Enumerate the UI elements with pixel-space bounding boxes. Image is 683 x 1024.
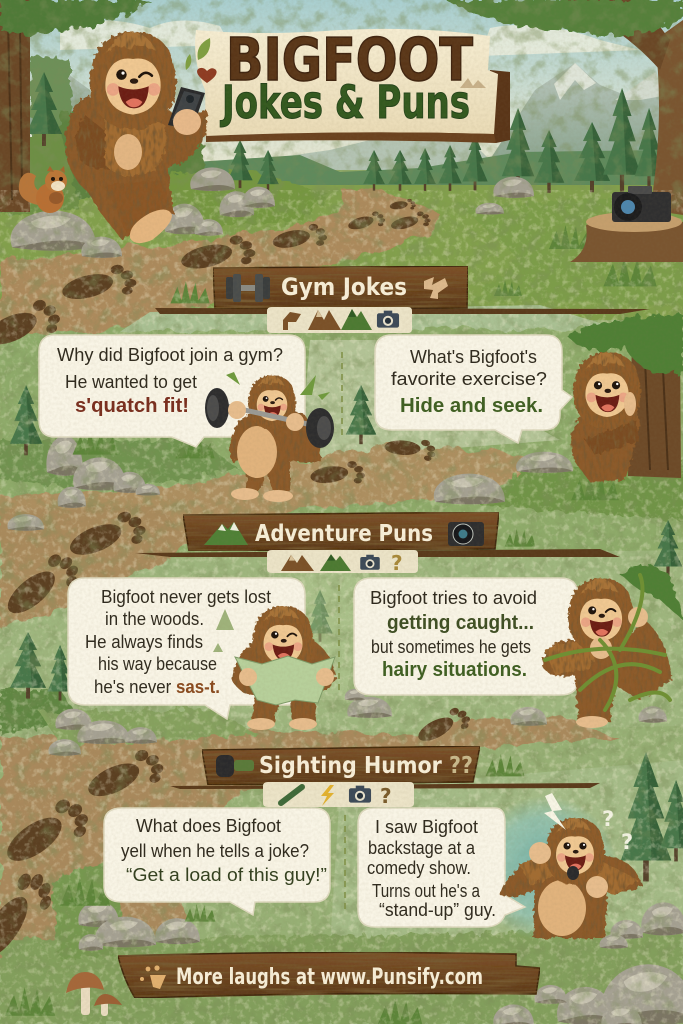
- icon: leaves and heart: [186, 38, 217, 83]
- mountains: [20, 63, 680, 175]
- question marks: ?: [602, 807, 614, 831]
- pun text: Bigfoot tries to avoid: [370, 588, 537, 608]
- illustration: bigfoot with barbell: [205, 372, 334, 502]
- illustration: main bigfoot with phone: [65, 32, 207, 243]
- joke text: I saw Bigfoot: [375, 817, 478, 837]
- footer sign: [118, 952, 540, 998]
- pun text: but sometimes he gets: [371, 637, 531, 657]
- speech bubble: gym joke 2: [375, 335, 572, 443]
- question marks: [602, 807, 633, 854]
- heading: Bigfoot: BIGFOOT: [226, 25, 473, 94]
- section sign: Sighting Humor: [202, 746, 480, 785]
- tree trunks and canopy: [0, 0, 683, 215]
- icon: map: [235, 656, 335, 705]
- icon: small tree marks: [213, 609, 234, 652]
- footer link text: More laughs at www.Punsify.com: [176, 965, 483, 990]
- illustration: bigfoot with map: [232, 606, 336, 730]
- joke text: comedy show.: [367, 858, 471, 878]
- illustration: bigfoot with microphone: [500, 793, 642, 938]
- heading: Gym Jokes: Gym Jokes: [281, 273, 407, 301]
- dashed dividers: [339, 352, 345, 910]
- section band: sighting: [170, 783, 600, 789]
- pun text: in the woods.: [105, 609, 204, 629]
- section band: adventure: [135, 549, 620, 557]
- question marks: ?: [621, 830, 633, 854]
- joke text: He wanted to get: [65, 372, 197, 392]
- icon: camera on tree stump: [570, 186, 683, 262]
- icon: footprint: [140, 965, 166, 989]
- icon: mountain: [204, 522, 248, 545]
- pun text: Bigfoot never gets lost: [101, 587, 271, 607]
- joke text: Why did Bigfoot join a gym?: [57, 345, 283, 365]
- vines: [545, 575, 670, 710]
- punchline: hairy situations.: [382, 659, 527, 681]
- speech bubble: sighting joke 1: [104, 808, 330, 915]
- icon strip: sighting: [263, 782, 414, 808]
- speech bubble: gym joke 1: [39, 335, 305, 447]
- motion leaves: [226, 372, 330, 400]
- footprint trail: [0, 199, 473, 969]
- section sign: Adventure Puns: [183, 512, 499, 551]
- pun text: his way because: [98, 654, 217, 674]
- question mark: ?: [391, 551, 403, 575]
- punchline: “Get a load of this guy!”: [126, 865, 327, 885]
- icon: lightning flash: [544, 793, 566, 830]
- question mark: ?: [380, 784, 392, 808]
- pun text: getting caught...: [387, 612, 534, 634]
- illustration: bigfoot tangled in vines: [542, 565, 683, 728]
- icon: barbell: [205, 388, 334, 448]
- joke text: What does Bigfoot: [136, 816, 281, 836]
- icon strip: gym: [267, 307, 412, 333]
- heading: Adventure Puns: Adventure Puns: [255, 521, 433, 547]
- section sign: Gym Jokes: [213, 266, 468, 309]
- speech bubble: adventure pun 2: [354, 578, 578, 695]
- icon: microphone: [216, 755, 254, 777]
- illustration: bigfoot peeking from tree: [566, 315, 683, 482]
- speech bubble: sighting joke 2: [358, 808, 525, 927]
- icon: dumbbell: [226, 274, 270, 302]
- icon strip: adventure: [267, 550, 418, 575]
- joke text: What's Bigfoot's: [410, 347, 537, 367]
- punchline: “stand-up” guy.: [379, 900, 496, 920]
- heading: Jokes & Puns: Jokes & Puns: [220, 76, 470, 129]
- title sign: [186, 25, 510, 143]
- heading: Sighting Humor: Sighting Humor ??: [259, 753, 473, 779]
- teal flash halo: [473, 796, 617, 940]
- pun text: he's never sas-t.: [94, 677, 220, 697]
- speech bubble: adventure pun 1: [68, 578, 305, 719]
- joke text: yell when he tells a joke?: [121, 841, 309, 861]
- icon: camera: [448, 522, 484, 546]
- section band: gym: [155, 308, 650, 314]
- joke text: favorite exercise?: [391, 369, 547, 389]
- punchline: s'quatch fit!: [75, 395, 189, 417]
- pun text: He always finds: [85, 632, 203, 652]
- joke text: backstage at a: [368, 838, 476, 858]
- joke text: Turns out he's a: [372, 881, 481, 901]
- illustration: squirrel on rock: [19, 166, 67, 213]
- icon: paw: [424, 277, 448, 299]
- icon: small mountains: [460, 78, 486, 88]
- punchline: Hide and seek.: [400, 395, 543, 417]
- grass tufts: [5, 225, 657, 1024]
- illustration: mushrooms: [66, 972, 122, 1016]
- pine trees: [10, 72, 683, 882]
